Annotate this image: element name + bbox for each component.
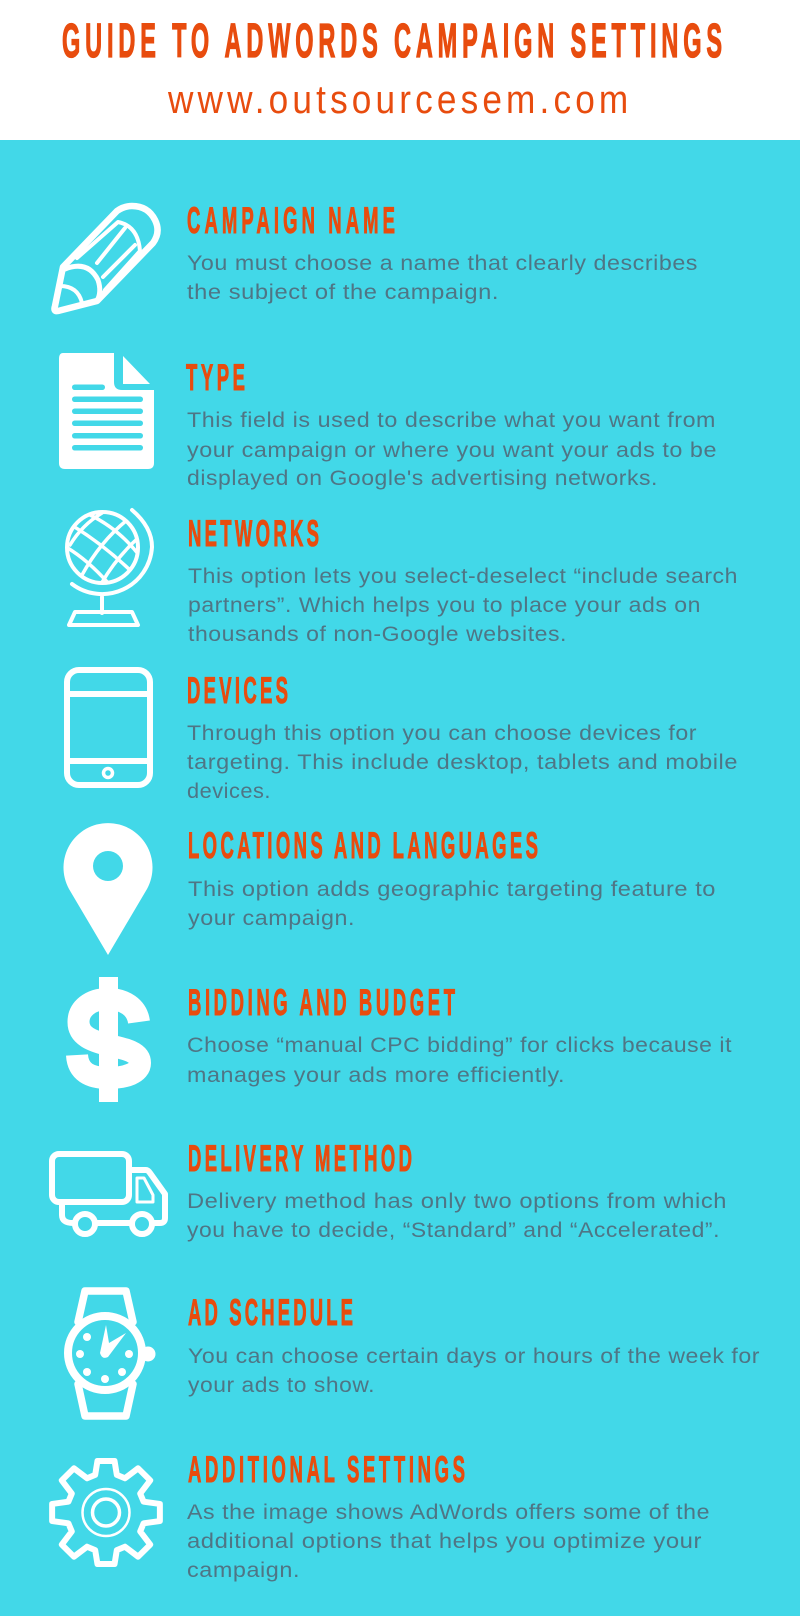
icon: delivery truck — [52, 1154, 165, 1234]
text: locations and languages — [188, 878, 716, 930]
text: devices: targeting. This include desktop, tablets and mobile — [187, 751, 738, 774]
text: campaign name — [187, 252, 698, 304]
heading: ad schedule: AD SCHEDULE — [188, 1293, 353, 1334]
text: bidding and budget: manages your ads more efficiently. — [187, 1064, 565, 1087]
text: type: your campaign or where you want your ads to be — [187, 439, 717, 462]
icon: document — [59, 353, 154, 469]
text: ad schedule: your ads to show. — [188, 1374, 375, 1397]
text: networks: This option lets you select-deselect “include search — [188, 565, 738, 588]
text: additional settings: additional options that helps you optimize your — [187, 1530, 702, 1553]
title: GUIDE TO ADWORDS CAMPAIGN SETTINGS — [62, 15, 722, 68]
text: additional settings: As the image shows AdWords offers some of the — [187, 1501, 710, 1524]
icon: tablet — [67, 670, 150, 785]
text: bidding and budget — [187, 1034, 732, 1087]
text: bidding and budget: Choose “manual CPC bidding” for clicks because it — [187, 1034, 732, 1057]
heading: networks: NETWORKS — [188, 514, 319, 555]
icon: globe — [66, 510, 152, 625]
icon: location pin — [64, 823, 152, 955]
text: additional settings: campaign. — [187, 1559, 300, 1582]
text: type — [187, 409, 717, 490]
text: devices: Through this option you can choose devices for — [187, 722, 697, 745]
website url: www.outsourcesem.com — [167, 77, 628, 121]
icon: watch — [68, 1291, 156, 1416]
text: ad schedule: You can choose certain days or hours of the week for — [188, 1345, 760, 1368]
heading: campaign name: CAMPAIGN NAME — [187, 201, 395, 242]
text: networks: partners”. Which helps you to place your ads on — [188, 594, 701, 617]
heading: additional settings: ADDITIONAL SETTINGS — [188, 1450, 465, 1491]
text: locations and languages: your campaign. — [188, 907, 355, 930]
text: ad schedule — [188, 1345, 760, 1397]
text: delivery method: Delivery method has only two options from which — [187, 1190, 727, 1213]
text: networks: thousands of non-Google websites. — [188, 623, 567, 646]
icon: dollar sign — [77, 977, 140, 1102]
text: delivery method — [187, 1190, 727, 1242]
icon: pencil — [54, 206, 158, 311]
text: devices: devices. — [187, 780, 271, 803]
heading: devices: DEVICES — [187, 671, 288, 712]
icon: gear — [52, 1461, 160, 1564]
text: devices — [187, 722, 738, 803]
text: type: displayed on Google's advertising networks. — [187, 467, 658, 490]
heading: delivery method: DELIVERY METHOD — [188, 1139, 412, 1180]
text: networks — [188, 565, 738, 646]
text: locations and languages: This option adds geographic targeting feature to — [188, 878, 716, 901]
text: campaign name: You must choose a name that clearly describes — [187, 252, 698, 275]
heading: type: TYPE — [186, 358, 245, 399]
text: campaign name: the subject of the campaign. — [187, 281, 499, 304]
heading: locations and languages: LOCATIONS AND LANGUAGES — [188, 826, 538, 867]
text: type: This field is used to describe what you want from — [187, 409, 716, 432]
text: delivery method: you have to decide, “Standard” and “Accelerated”. — [187, 1219, 720, 1242]
text: additional settings — [187, 1501, 710, 1582]
heading: bidding and budget: BIDDING AND BUDGET — [188, 983, 455, 1024]
